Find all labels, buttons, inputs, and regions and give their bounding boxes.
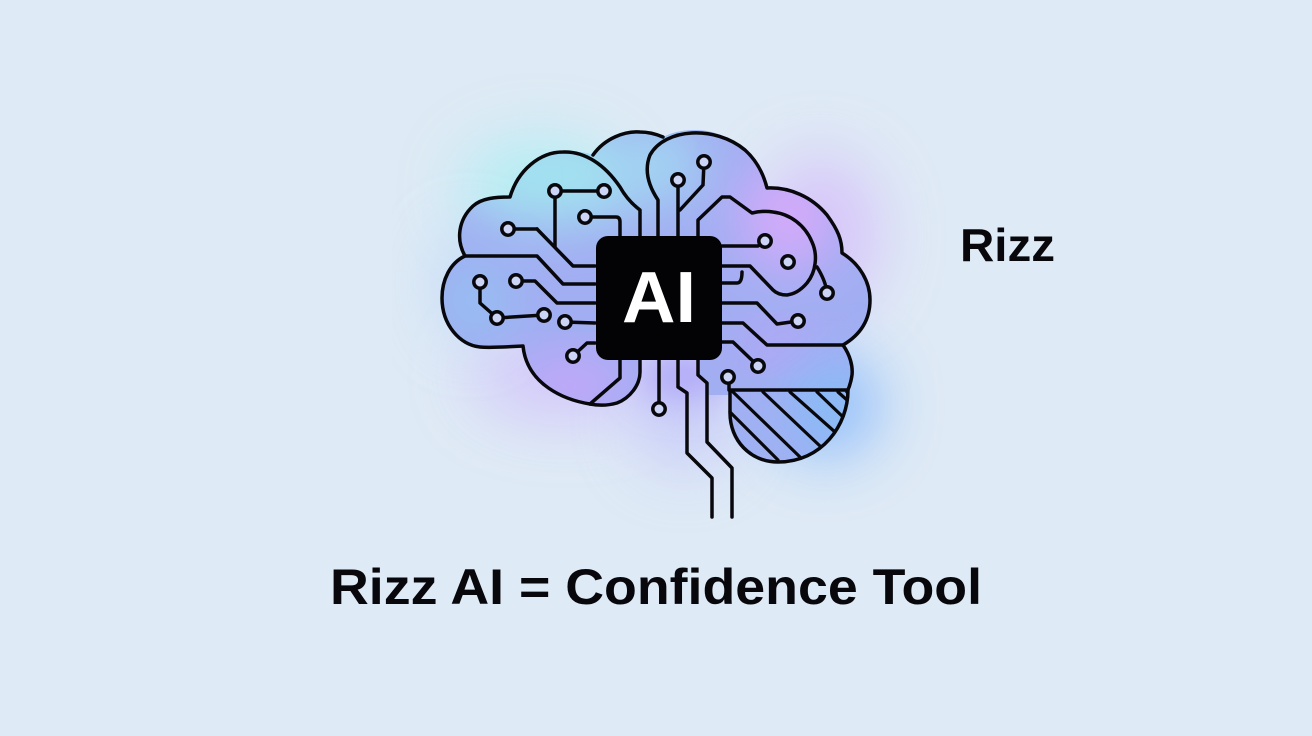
top centre traces (678, 162, 704, 236)
right upper traces (722, 241, 765, 246)
cerebellum (730, 390, 848, 462)
circuit node circles (474, 156, 833, 415)
top left traces (508, 191, 620, 247)
brain outline: upper-left lobe (460, 152, 640, 256)
soft colour glow behind brain (440, 140, 880, 468)
brain interior gradient (444, 130, 868, 460)
brain outline: top right lobes (647, 133, 870, 392)
inner right lobe contour (698, 197, 815, 295)
brain circuit line art (442, 132, 870, 517)
title: Rizz AI = Confidence Tool (330, 559, 982, 615)
short hook trace (722, 272, 742, 283)
infographic canvas (334, 116, 1054, 604)
brain outline: lower left divider (590, 360, 620, 404)
left traces (480, 281, 595, 356)
brain outline: left lobe (442, 229, 640, 405)
bottom traces (657, 360, 661, 409)
side label: Rizz (960, 219, 1055, 271)
right lower traces (722, 303, 843, 366)
chip label: AI (622, 258, 696, 338)
brain outline: top lobe (593, 132, 663, 155)
AI chip (596, 236, 722, 360)
